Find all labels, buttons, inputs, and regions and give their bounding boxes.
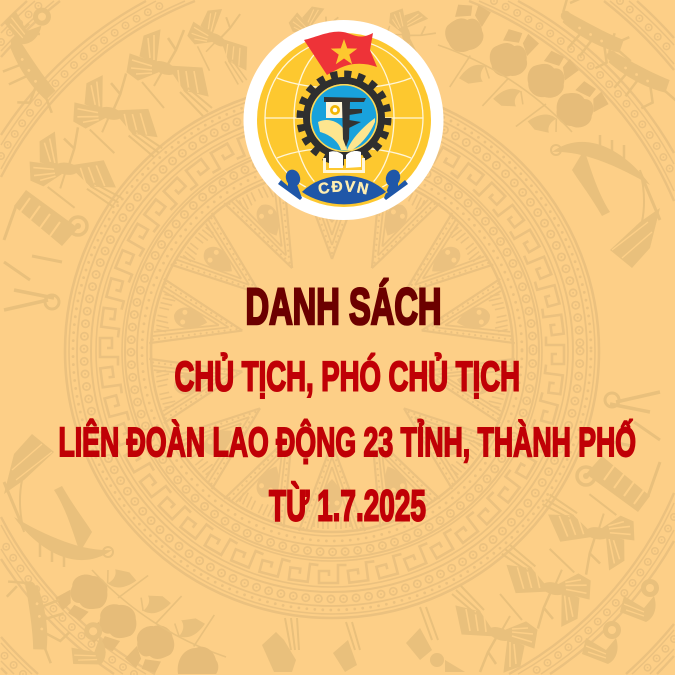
logo blue disc with caliper	[310, 84, 378, 152]
logo book	[323, 151, 365, 173]
central star wedges	[149, 171, 515, 531]
inner ornamental rings	[65, 84, 599, 618]
logo banner	[302, 176, 388, 204]
date line: TỪ 1.7.2025	[269, 480, 426, 530]
meander key band	[90, 109, 574, 593]
logo yellow globe	[257, 33, 431, 207]
logo gear	[301, 75, 387, 161]
logo blue clubs	[278, 168, 408, 200]
animal frieze, upper half	[4, 27, 660, 310]
logo flag	[304, 32, 377, 75]
animal frieze, lower half	[4, 392, 660, 675]
bottom edge bird tails and pot	[178, 607, 465, 674]
top edge birds and pot	[179, 0, 493, 86]
title: DANH SÁCH: DANH SÁCH	[246, 278, 442, 335]
logo banner: CĐVN	[318, 180, 369, 194]
logo: Cong doan Viet Nam emblem	[244, 20, 444, 220]
logo white disc	[244, 20, 444, 220]
